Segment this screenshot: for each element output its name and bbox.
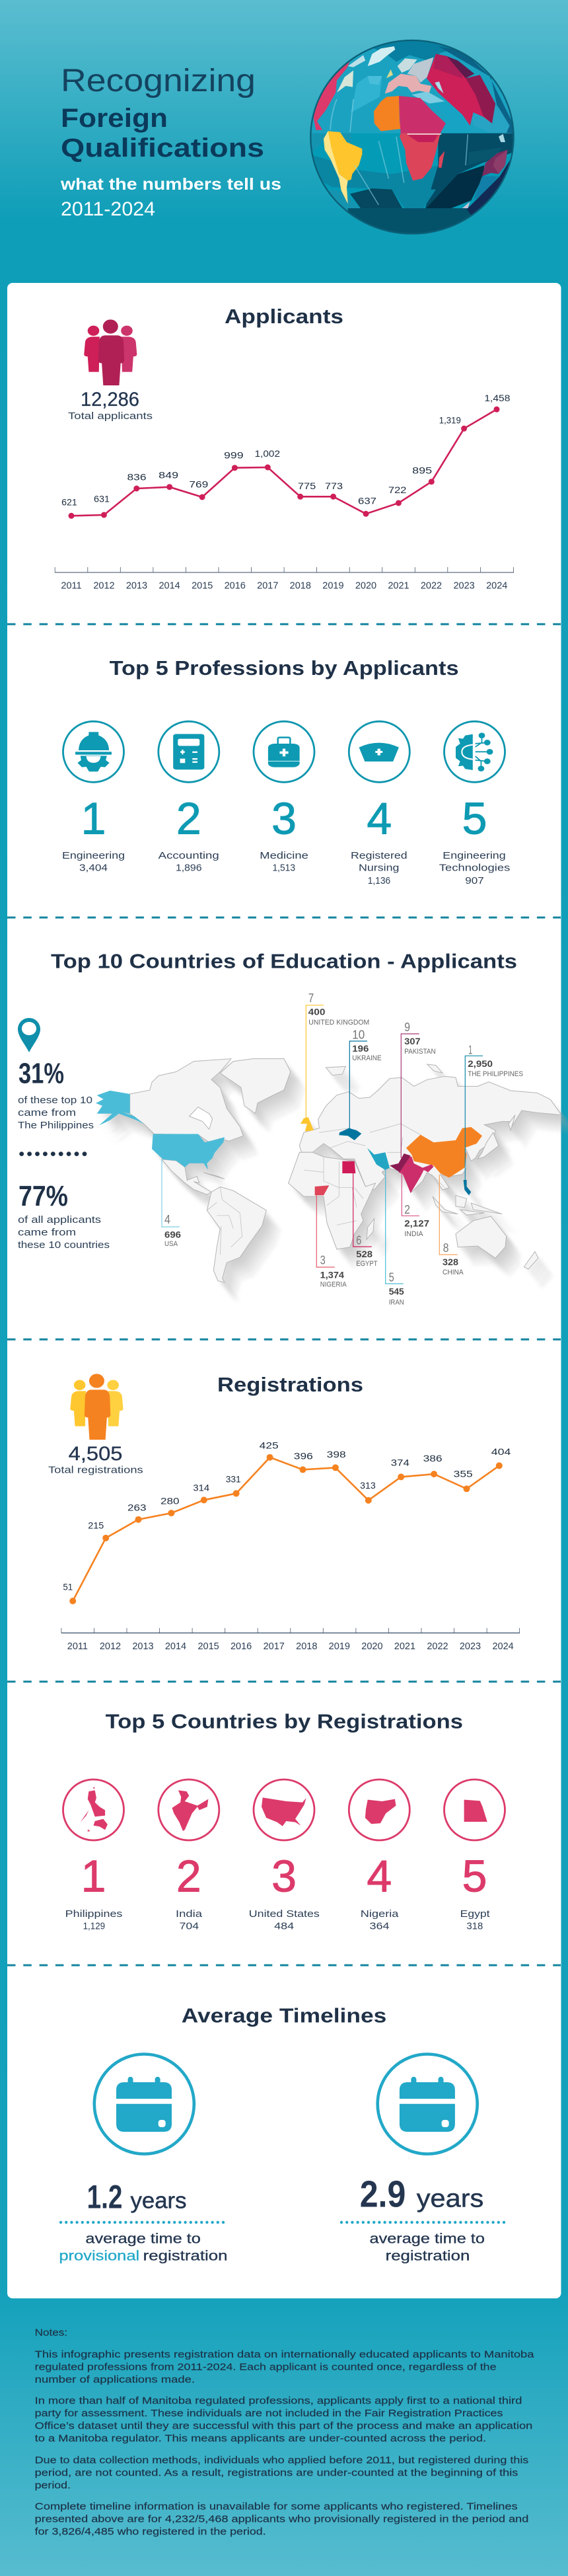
list: countries ranks: Nigeria [361,1909,400,1920]
line chart: registrations per year: 314 [193,1483,209,1493]
title block: Qualifications [61,134,264,163]
notes text block: regulated professions from 2011-2024. Each applicant is counted once, regardless of the [35,2362,496,2373]
icon: medicine bag [268,738,300,767]
line chart: registrations per year: 51 [63,1582,73,1592]
stat: total applicants: Total applicants [68,410,153,422]
callout: USA: USA [164,1240,178,1248]
line chart: registrations per year: 2017 [264,1641,285,1652]
stat: total applicants [68,389,153,422]
stat: time to provisional registration: provisional [59,2248,139,2263]
icon: India shape [172,1790,208,1831]
icon: Nigeria shape [365,1799,396,1824]
icon: map pin [18,1018,40,1052]
list: professions ranks: 1 [81,794,106,844]
line chart: registrations per year: 2011 [67,1641,88,1652]
list: professions ranks: Technologies [439,863,510,874]
line chart: applicants per year: 2024 [486,581,507,592]
line chart: registrations per year: 404 [491,1446,511,1457]
stat: time to provisional registration: registration [143,2248,227,2263]
callout: Egypt: 6 [356,1233,361,1247]
title block: what the numbers tell us [60,175,281,194]
stat: 31 percent [18,1057,94,1131]
list: professions ranks: 1,136 [368,876,390,886]
list: professions ranks: Engineering [62,851,125,861]
stat: total registrations [48,1443,143,1476]
line chart: registrations per year: 331 [226,1474,241,1485]
notes text block: to a Manitoba regulator. This means applicants are under-counted across the period. [35,2433,486,2444]
line chart: applicants per year: 2016 [225,581,246,592]
line chart: applicants per year: 775 [298,481,316,491]
line chart: registrations per year: 2023 [460,1641,481,1652]
list: professions ranks: 1,896 [176,863,202,874]
line chart: applicants per year: 2012 [93,581,115,592]
callout: Pakistan: 307 [404,1036,421,1046]
notes text block: Office’s dataset until they are successful with this part of the process and make an application [35,2421,532,2432]
line chart: applicants per year: 2018 [290,581,311,592]
list: countries ranks: 4 [367,1852,392,1902]
list: countries ranks: 5 [462,1852,487,1902]
callout: Philippines: 2,950 [468,1058,493,1069]
callout: USA: 696 [164,1229,181,1240]
icon: United States shape [262,1797,306,1826]
callout: Nigeria: 1,374 [320,1269,344,1280]
icon: registrations people [70,1374,123,1440]
line chart: applicants per year: 2013 [126,581,147,592]
list: professions ranks: Medicine [260,851,308,861]
notes text block: This infographic presents registration data on internationally educated applicants to Manitoba [35,2349,534,2361]
line chart: applicants per year: 2017 [257,581,278,592]
stat: 77 percent: of all applicants [18,1214,101,1226]
stat: 77 percent [18,1180,110,1251]
line chart: applicants per year: 2021 [388,581,409,592]
line chart: registrations per year: 313 [360,1480,376,1491]
title block: Foreign [61,104,168,133]
callout: Ukraine: UKRAINE [352,1054,382,1062]
icon: Egypt shape [464,1800,487,1822]
list: professions ranks: Nursing [359,863,399,874]
stat: total applicants: 12,286 [81,389,139,410]
list: professions ranks: 3,404 [79,863,108,874]
line chart: applicants per year: 631 [94,494,110,504]
list: professions ranks: 1,513 [272,863,295,874]
callout: Philippines: 1 [468,1043,472,1056]
icon: applicants people [84,319,137,385]
line chart: applicants per year: 2011 [61,581,82,592]
line chart: applicants per year: 2019 [322,581,344,592]
map: world map of top 10 countries [96,992,561,1306]
line chart: registrations per year: 215 [88,1520,104,1531]
line chart: registrations per year: 2014 [165,1641,186,1652]
line chart: applicants per year: 1,319 [439,415,461,426]
line chart: applicants per year: 1,458 [484,393,511,403]
icon: calendar provisional [94,2054,194,2154]
icon: accounting calculator [173,734,204,769]
stat: time to registration: registration [386,2248,470,2263]
callout: India [404,1203,429,1238]
callout: Iran: 5 [389,1271,394,1284]
stat: 77 percent: came from [18,1227,76,1238]
line chart: applicants per year: 769 [189,479,209,490]
stat: 31 percent: 31% [18,1057,64,1089]
callout: Iran: 545 [389,1286,404,1297]
notes text block: Due to data collection methods, individuals who applied before 2011, but registered during this [35,2455,528,2466]
callout: China: CHINA [443,1268,464,1276]
list: countries ranks: 704 [180,1922,199,1932]
line chart: registrations per year: 386 [423,1453,443,1464]
title block: Recognizing [61,63,256,98]
callout: Pakistan: 9 [404,1021,410,1034]
line chart: registrations per year: 2012 [100,1641,121,1652]
line chart: registrations per year: 2020 [361,1641,383,1652]
list: countries ranks: 364 [370,1922,390,1932]
stat: 77 percent: these 10 countries [18,1239,110,1251]
line chart: applicants per year: 2015 [192,581,213,592]
stat: 31 percent: The Philippines [18,1120,94,1131]
callout: United Kingdom: 400 [308,1007,326,1017]
heading: Top 5 Countries: Top 5 Countries by Registrations [106,1709,463,1733]
notes text block [35,2327,534,2538]
icon: calendar registration [378,2054,478,2154]
heading: Top 10 Countries: Top 10 Countries of Education - Applicants [51,949,517,973]
line chart: applicants per year: 2014 [159,581,180,592]
heading: Average Timelines: Average Timelines [182,2004,386,2027]
stat: 77 percent: 77% [18,1180,68,1212]
list: professions ranks: Engineering [443,851,506,861]
callout: USA: 4 [164,1213,170,1226]
line chart: registrations per year: 280 [160,1496,180,1506]
line chart: applicants per year: 836 [127,472,147,483]
notes text block: Notes: [35,2327,67,2338]
icon: nurse cap [359,743,399,761]
heading: Top 5 Professions: Top 5 Professions by Applicants [110,656,459,680]
stat: 31 percent: of these top 10 [18,1095,92,1106]
icon: engineering helmet and gear [75,732,112,771]
line chart: applicants per year: 895 [412,465,432,476]
line chart: applicants per year: 1,002 [255,448,280,459]
line chart: registrations per year: 425 [260,1440,279,1451]
line chart: registrations per year [61,1440,520,1652]
line chart: registrations per year: 2024 [492,1641,514,1652]
line chart: registrations per year: 2013 [132,1641,154,1652]
notes text block: period. [35,2480,71,2491]
stat: time to provisional registration [59,2179,228,2263]
list: countries ranks: Egypt [460,1909,490,1920]
line chart: registrations per year: 2022 [427,1641,448,1652]
callout: Pakistan [404,1021,436,1056]
line chart: registrations per year: 2021 [394,1641,415,1652]
list: professions ranks: Accounting [159,851,219,861]
line chart: applicants per year: 849 [159,470,178,481]
line chart: applicants per year: 637 [358,496,376,506]
line chart: applicants per year: 2023 [453,581,475,592]
list: professions ranks [62,794,510,886]
list: professions ranks: 4 [367,794,392,844]
list: countries ranks: India [176,1909,203,1920]
callout: Ukraine: 10 [352,1029,365,1042]
list: professions ranks: 5 [462,794,487,844]
line chart: applicants per year: 999 [224,449,244,460]
list: countries ranks: 2 [176,1852,201,1902]
notes text block: period, are not counted. As a result, registrations are under-counted at the beginning of this [35,2468,518,2479]
icon: Philippines shape [81,1787,108,1832]
callout: China [443,1241,464,1276]
title block: 2011-2024 [61,198,155,220]
notes text block: number of applications made. [35,2374,195,2386]
panel: white content card [7,283,561,2298]
list: countries ranks: 318 [466,1922,483,1932]
callout: United Kingdom: 7 [308,992,314,1005]
line chart: registrations per year: 263 [127,1503,147,1513]
line chart: registrations per year: 2015 [197,1641,219,1652]
list: countries ranks: 3 [271,1852,297,1902]
callout: China: 328 [443,1257,458,1267]
line chart: applicants per year: 621 [61,497,77,508]
divider dots [19,1151,87,1156]
list: countries ranks: United States [249,1909,320,1920]
callout: Nigeria: 3 [320,1254,326,1267]
callout: Ukraine: 196 [352,1043,369,1054]
list: professions ranks: 907 [465,876,484,886]
stat: total registrations: Total registrations [48,1465,143,1476]
list: professions ranks: 2 [176,794,201,844]
stat: time to registration: 2.9 [360,2173,406,2215]
line chart: registrations per year: 396 [294,1450,313,1461]
callout: Nigeria: NIGERIA [320,1281,347,1289]
line chart: applicants per year [55,393,514,592]
callout: USA [164,1213,181,1248]
line chart: registrations per year: 2016 [231,1641,252,1652]
list: countries ranks [65,1852,490,1932]
line chart: registrations per year: 374 [391,1458,409,1468]
notes text block: for 3,826/4,485 who registered in the period. [35,2526,266,2538]
stat: time to provisional registration: 1.2 [87,2179,122,2216]
line chart: applicants per year: 722 [388,485,407,495]
heading: Applicants: Applicants [225,305,343,328]
line chart: registrations per year: 398 [327,1449,346,1460]
notes text block: In more than half of Manitoba regulated professions, applicants apply first to a national third [35,2396,522,2407]
callout: Egypt: 528 [356,1249,373,1259]
callout: Egypt: EGYPT [356,1260,378,1268]
stat: time to registration [341,2173,504,2263]
line chart: applicants per year: 2022 [421,581,442,592]
callout: Ukraine [352,1029,382,1062]
callout: United Kingdom: UNITED KINGDOM [308,1019,369,1027]
stat: time to provisional registration: years [131,2189,186,2214]
line chart: registrations per year: 355 [454,1468,473,1479]
callout: China: 8 [443,1241,448,1255]
notes text block: presented above are for 4,232/5,468 applicants who provisionally registered in the period and [35,2514,528,2525]
stat: time to registration: average time to [370,2231,485,2246]
callout: Philippines [468,1043,523,1078]
callout: Philippines: THE PHILIPPINES [468,1070,523,1078]
callout: Pakistan: PAKISTAN [404,1048,436,1056]
callout: India: 2 [404,1203,410,1216]
stat: 31 percent: came from [18,1107,76,1118]
icon: engineering technology gear circuit [456,732,493,771]
callout: Egypt [356,1233,378,1268]
line chart: registrations per year: 2018 [296,1641,317,1652]
callout: India: INDIA [404,1230,423,1238]
list: professions ranks: Registered [351,851,408,861]
heading: Registrations: Registrations [217,1373,363,1396]
list: countries ranks: Philippines [65,1909,122,1920]
list: professions ranks: 3 [271,794,297,844]
callout: Iran: IRAN [389,1298,404,1306]
list: countries ranks: 1 [81,1852,106,1902]
callout: India: 2,127 [404,1218,429,1229]
callout: United Kingdom [308,992,369,1027]
panel: country icons [63,1779,505,1840]
list: countries ranks: 1,129 [83,1922,105,1932]
title block [60,63,281,220]
line chart: registrations per year: 2019 [329,1641,350,1652]
stat: time to registration: years [417,2185,483,2212]
callout: Iran [389,1271,404,1306]
stat: total registrations: 4,505 [69,1443,122,1465]
line chart: applicants per year: 2020 [355,581,376,592]
icon: globe [308,40,517,238]
panel: professions icons [63,721,505,782]
callout: Nigeria [320,1254,347,1289]
stat: time to provisional registration: average time to [85,2231,201,2246]
notes text block: Complete timeline information is unavailable for some applicants who registered. Timelines [35,2501,518,2513]
notes text block: party for assessment. These individuals are not included in the Fair Registration Practices [35,2408,503,2419]
line chart: applicants per year: 773 [325,481,343,491]
list: countries ranks: 484 [274,1922,294,1932]
